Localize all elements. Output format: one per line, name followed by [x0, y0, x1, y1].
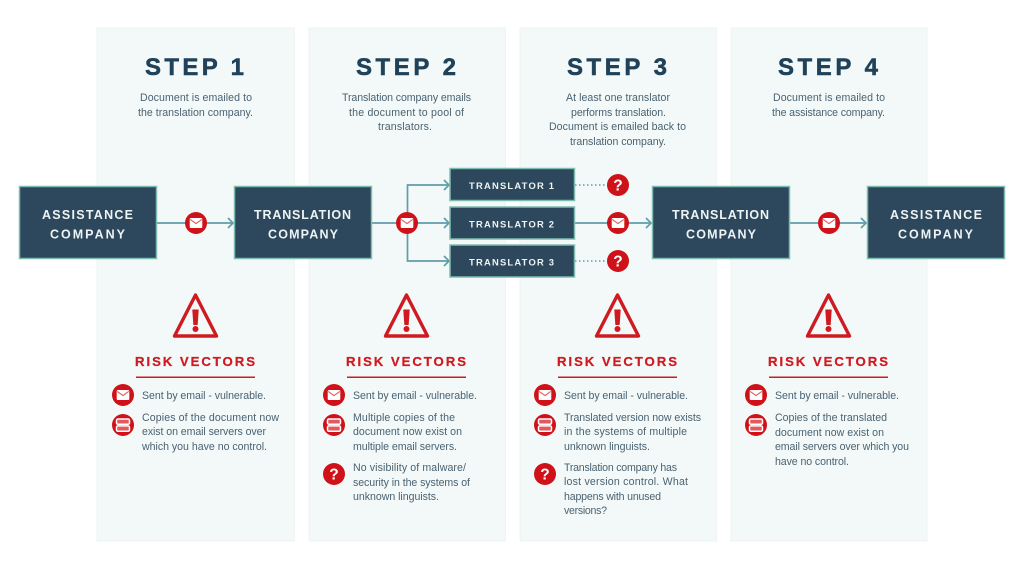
risk vectors heading: step 1: RISK VECTORS [135, 354, 255, 369]
icon: server risk step 3 [534, 414, 556, 436]
icon: warning step 2 [386, 295, 428, 336]
icon: question translator 1 [607, 174, 629, 196]
box: translator 1 [450, 168, 574, 200]
panel: step 3 [520, 28, 716, 541]
icon: warning step 4 [808, 295, 850, 336]
box: assistance company return [868, 186, 1004, 258]
description: step 1: the translation company. [138, 107, 253, 119]
description: step 3: Document is emailed back to [549, 121, 686, 133]
icon: server risk step 4 [745, 414, 767, 436]
risk text: sent by email step 1: Sent by email - vulnerable. [142, 390, 266, 402]
icon: email risk step 3 [534, 384, 556, 406]
dotted line: translator 1 [575, 184, 608, 186]
risk text: copies step 1: Copies of the document now [142, 412, 279, 424]
risk text: multiple copies step 2: document now exist on [353, 426, 462, 438]
box: translation company return: COMPANY [686, 228, 757, 242]
risk text: no visibility step 2: security in the systems of [353, 477, 470, 489]
description: step 4 [772, 92, 885, 119]
icon: question risk step 3 [534, 463, 556, 485]
risk text: version control step 3: versions? [564, 505, 607, 517]
risk text: no visibility step 2: No visibility of malware/ [353, 462, 466, 474]
icon: email risk step 1 [112, 384, 134, 406]
box: assistance company return: COMPANY [898, 228, 974, 242]
panel: step 4 [731, 28, 927, 541]
description: step 1 [138, 92, 253, 119]
flow arrow: translation to assistance [790, 218, 866, 228]
box: translator 3 [450, 245, 574, 277]
icon: question translator 3 [607, 250, 629, 272]
description: step 1: Document is emailed to [140, 92, 252, 104]
risk text: copies step 4: Copies of the translated [775, 412, 887, 424]
icon: email step 2 flow [396, 212, 418, 234]
icon: email step 3 flow [607, 212, 629, 234]
icon: warning step 1 [174, 295, 216, 336]
icon: email step 1 flow [185, 212, 207, 234]
risk text: sent by email step 3: Sent by email - vulnerable. [564, 390, 688, 402]
heading: step 2: STEP 2 [356, 54, 456, 81]
description: step 3: At least one translator [566, 92, 670, 104]
panel: step 1 [97, 28, 294, 541]
risk text: copies step 4: email servers over which you [775, 441, 909, 453]
box: translator 3: TRANSLATOR 3 [469, 256, 554, 268]
risk text: version control step 3 [564, 462, 688, 517]
icon: question translator 1: ? [613, 178, 623, 194]
flow arrows: translation to translators [372, 180, 449, 266]
description: step 3 [549, 92, 686, 148]
risk text: multiple copies step 2 [353, 412, 462, 453]
box: translator 2 [450, 207, 574, 239]
risk text: version control step 3: lost version control. What [564, 476, 688, 488]
box: assistance company: COMPANY [50, 228, 126, 242]
icon: question risk step 2: ? [329, 466, 339, 484]
risk vectors heading: step 3 [557, 354, 677, 378]
risk text: sent by email step 2: Sent by email - vulnerable. [353, 390, 477, 402]
box: translator 1: TRANSLATOR 1 [469, 180, 554, 191]
description: step 4: Document is emailed to [773, 92, 885, 104]
icon: email risk step 4 [745, 384, 767, 406]
icon: server risk step 1 [112, 414, 134, 436]
risk text: copies step 1 [141, 412, 279, 453]
risk text: copies step 1: which you have no control. [141, 441, 267, 453]
heading: step 4: STEP 4 [778, 54, 879, 81]
flow arrow: translator 2 to translation [575, 218, 651, 228]
description: step 3: translation company. [570, 136, 666, 148]
risk vectors heading: step 3: RISK VECTORS [557, 354, 677, 369]
box: translation company return: TRANSLATION [672, 208, 769, 222]
heading: step 3: STEP 3 [567, 54, 667, 81]
description: step 4: the assistance company. [772, 107, 885, 119]
risk text: no visibility step 2: unknown linguists. [353, 491, 439, 503]
risk vectors heading: step 1 [135, 354, 255, 378]
box: translator 2: TRANSLATOR 2 [469, 218, 554, 230]
description: step 2: the document to pool of [349, 107, 464, 119]
icon: warning step 3 [596, 295, 638, 336]
risk text: version control step 3: happens with unused [564, 491, 661, 503]
box: translation company: TRANSLATION [254, 208, 351, 222]
flow arrow: assistance to translation [157, 218, 233, 228]
box: assistance company [20, 186, 156, 258]
risk text: copies step 4: document now exist on [775, 427, 884, 439]
description: step 3: performs translation. [571, 107, 666, 119]
box: translation company [234, 186, 372, 258]
risk vectors heading: step 4 [768, 354, 888, 378]
icon: email step 4 flow [818, 212, 840, 234]
description: step 2: Translation company emails [342, 92, 471, 104]
risk text: copies step 4 [775, 412, 909, 468]
icon: question risk step 2 [323, 463, 345, 485]
heading: step 1: STEP 1 [145, 54, 244, 81]
risk vectors heading: step 2 [346, 354, 466, 378]
dotted line: translator 3 [575, 260, 608, 262]
icon: question risk step 3: ? [540, 466, 550, 484]
risk text: translated version step 3: unknown linguists. [564, 441, 650, 453]
description: step 2: translators. [378, 121, 432, 133]
icon: email risk step 2 [323, 384, 345, 406]
risk text: copies step 4: have no control. [775, 456, 849, 468]
risk vectors heading: step 2: RISK VECTORS [346, 354, 466, 369]
risk text: sent by email step 4: Sent by email - vulnerable. [775, 390, 899, 402]
risk text: no visibility step 2 [353, 462, 470, 503]
risk text: multiple copies step 2: Multiple copies of the [353, 412, 455, 424]
box: assistance company return: ASSISTANCE [890, 208, 982, 222]
box: translation company return [652, 186, 790, 258]
icon: server risk step 2 [323, 414, 345, 436]
description: step 2 [342, 92, 471, 133]
risk text: version control step 3: Translation company has [564, 462, 677, 474]
box: translation company: COMPANY [268, 228, 339, 242]
icon: question translator 3: ? [613, 254, 623, 270]
risk text: translated version step 3: Translated version now exists [564, 412, 701, 424]
risk text: translated version step 3: in the systems of multiple [564, 426, 687, 438]
risk text: copies step 1: exist on email servers over [142, 426, 266, 438]
risk text: multiple copies step 2: multiple email servers. [353, 441, 457, 453]
risk vectors heading: step 4: RISK VECTORS [768, 354, 888, 369]
panel: step 2 [309, 28, 506, 541]
risk text: translated version step 3 [564, 412, 701, 453]
box: assistance company: ASSISTANCE [42, 208, 133, 222]
